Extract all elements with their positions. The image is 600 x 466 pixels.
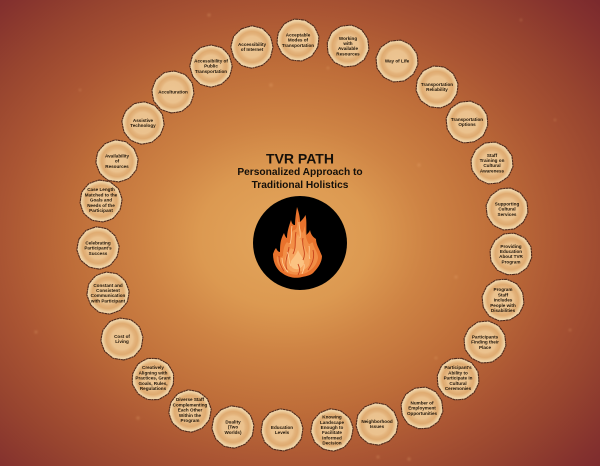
subtitle: Traditional Holistics: [252, 180, 349, 191]
subtitle: Personalized Approach to: [237, 167, 363, 178]
node: Participants Finding their Place: [455, 312, 515, 372]
node: Participant's Ability to Participate in Cultural Ceremonies: Ceremonies: [445, 386, 472, 391]
node: Participants Finding their Place: Place: [479, 345, 491, 350]
node: Case Length Matched to the Goals and Needs of the Participant: Goals and: [90, 198, 112, 203]
node: Availability of Resources: of: [115, 159, 120, 164]
node: Cost of Living: [99, 316, 145, 362]
node: Creatively Aligning with Practices, Grant Goals, Rules, Regulations: Practices, Grant: [135, 376, 171, 381]
node: Accessibility of Public Transportation: Public: [204, 64, 218, 69]
node: Knowing Landscape Enough to Facilitate Informed Decision: Facilitate: [322, 430, 342, 435]
node: Staff Training on Cultural Awareness: Cultural: [483, 163, 501, 168]
node: Acculturation: [150, 69, 196, 115]
node: Accessibility of Internet: of Internet: [241, 47, 264, 52]
node: Number of Employment Opportunities: [395, 381, 449, 435]
node: Creatively Aligning with Practices, Grant Goals, Rules, Regulations: Regulations: [140, 386, 167, 391]
node: Case Length Matched to the Goals and Needs of the Participant: Needs of the: [87, 203, 115, 208]
node: Working with Available Resources: Resources: [336, 51, 360, 56]
node: Knowing Landscape Enough to Facilitate Informed Decision: [304, 402, 360, 458]
node: Duality (Two Worlds): Worlds): [224, 430, 242, 435]
node: Supporting Cultural Services: [477, 179, 537, 239]
node: Participant's Ability to Participate in Cultural Ceremonies: [434, 355, 483, 403]
node: Staff Training on Cultural Awareness: Training on: [480, 158, 505, 163]
node: Diverse Staff Complementing Each Other Within the Program: Diverse Staff: [176, 397, 205, 402]
node: Program Staff Includes People with Disabilities: [476, 273, 530, 327]
node: Celebrating Participant's Success: Success: [89, 251, 108, 256]
node: Participants Finding their Place: Finding their: [471, 340, 499, 345]
node: Diverse Staff Complementing Each Other Within the Program: Each Other: [178, 408, 202, 413]
node: Accessibility of Internet: [223, 18, 281, 76]
node: Accessibility of Public Transportation: Transportation: [195, 69, 227, 74]
node: Supporting Cultural Services: Cultural: [498, 207, 516, 212]
node: Creatively Aligning with Practices, Grant Goals, Rules, Regulations: Goals, Rules,: [138, 381, 168, 386]
node: Availability of Resources: Resources: [105, 164, 129, 169]
node: Case Length Matched to the Goals and Needs of the Participant: Participant: [89, 208, 113, 213]
node: Accessibility of Public Transportation: [182, 37, 240, 95]
node: Availability of Resources: Availability: [105, 153, 129, 158]
node: Education Levels: Education: [271, 425, 293, 430]
node: Acceptable Modes of Transportation: Acceptable: [286, 32, 311, 37]
node: Program Staff Includes People with Disabilities: People with: [490, 303, 516, 308]
node: Availability of Resources: [88, 132, 146, 190]
node: Knowing Landscape Enough to Facilitate Informed Decision: Decision: [322, 441, 342, 446]
node: Creatively Aligning with Practices, Grant Goals, Rules, Regulations: Creatively: [142, 365, 164, 370]
node: Program Staff Includes People with Disabilities: Program: [494, 287, 512, 292]
node: Working with Available Resources: Available: [338, 46, 358, 51]
node: Neighborhood Issues: Issues: [370, 424, 385, 429]
node: Supporting Cultural Services: Services: [498, 212, 517, 217]
node: Celebrating Participant's Success: Participant's: [84, 246, 112, 251]
node: Accessibility of Public Transportation: Accessibility of: [194, 58, 228, 63]
node: Assistive Technology: Assistive: [133, 118, 154, 123]
node: Diverse Staff Complementing Each Other Within the Program: Program: [181, 418, 199, 423]
node: Knowing Landscape Enough to Facilitate Informed Decision: Enough to: [321, 425, 344, 430]
node: Constant and Consistent Communication with Participant: Constant and: [93, 283, 123, 288]
node: Way of Life: Way of Life: [385, 59, 410, 64]
node: Staff Training on Cultural Awareness: Staff: [487, 153, 498, 158]
node: Providing Education About TVR Program: [486, 230, 535, 278]
node: Case Length Matched to the Goals and Needs of the Participant: [78, 178, 124, 224]
node: Participants Finding their Place: Participants: [472, 334, 499, 339]
node: Participant's Ability to Participate in Cultural Ceremonies: Ability to: [448, 370, 468, 375]
node: Number of Employment Opportunities: Opportunities: [407, 411, 437, 416]
node: Transportation Options: Transportation: [451, 117, 483, 122]
node: Working with Available Resources: [321, 19, 375, 73]
node: Duality (Two Worlds): [204, 398, 262, 456]
node: Constant and Consistent Communication with Participant: [79, 264, 137, 322]
node: Acceptable Modes of Transportation: [271, 13, 325, 67]
node: Providing Education About TVR Program: Education: [500, 249, 522, 254]
node: Knowing Landscape Enough to Facilitate Informed Decision: Informed: [322, 435, 342, 440]
node: Case Length Matched to the Goals and Needs of the Participant: Case Length: [87, 187, 115, 192]
node: Providing Education About TVR Program: About TVR: [499, 254, 524, 259]
node: Participant's Ability to Participate in Cultural Ceremonies: Participate in: [444, 376, 473, 381]
node: Working with Available Resources: Working: [339, 36, 357, 41]
node: Program Staff Includes People with Disabilities: Includes: [494, 298, 513, 303]
node: Acceptable Modes of Transportation: Modes of: [288, 38, 309, 43]
node: Providing Education About TVR Program: Program: [502, 259, 520, 264]
node: Constant and Consistent Communication with Participant: Communication: [91, 293, 126, 298]
node: Transportation Reliability: [410, 60, 464, 114]
node: Way of Life: [367, 31, 427, 91]
node: Neighborhood Issues: [348, 395, 406, 453]
node: Diverse Staff Complementing Each Other Within the Program: Within the: [179, 413, 202, 418]
node: Cost of Living: Cost of: [114, 334, 130, 339]
node: Creatively Aligning with Practices, Grant Goals, Rules, Regulations: [127, 353, 179, 405]
node: Duality (Two Worlds): Duality: [225, 419, 241, 424]
node: Supporting Cultural Services: Supporting: [495, 201, 519, 206]
node: Constant and Consistent Communication with Participant: with Participant: [90, 298, 126, 303]
node: Program Staff Includes People with Disabilities: Disabilities: [491, 308, 516, 313]
node: Duality (Two Worlds): (Two: [228, 425, 238, 430]
node: Transportation Options: [440, 95, 494, 149]
node: Accessibility of Internet: Accessibility: [238, 42, 266, 47]
node: Program Staff Includes People with Disabilities: Staff: [498, 292, 509, 297]
node: Transportation Options: Options: [458, 122, 476, 127]
node: Celebrating Participant's Success: Celebrating: [85, 240, 111, 245]
node: Working with Available Resources: with: [342, 41, 353, 46]
node: Assistive Technology: [114, 94, 172, 152]
node: Participant's Ability to Participate in Cultural Ceremonies: Cultural: [449, 381, 467, 386]
node: Knowing Landscape Enough to Facilitate Informed Decision: Landscape: [320, 420, 344, 425]
node: Constant and Consistent Communication with Participant: Consistent: [96, 288, 120, 293]
node: Knowing Landscape Enough to Facilitate Informed Decision: Knowing: [322, 415, 342, 420]
node: Staff Training on Cultural Awareness: [462, 133, 522, 193]
node: Diverse Staff Complementing Each Other Within the Program: Complementing: [173, 402, 208, 407]
node: Staff Training on Cultural Awareness: Awareness: [480, 168, 505, 173]
node: Education Levels: [259, 407, 305, 453]
node: Participant's Ability to Participate in Cultural Ceremonies: Participant's: [444, 365, 472, 370]
node: Education Levels: Levels: [275, 430, 290, 435]
node: Number of Employment Opportunities: Employment: [408, 406, 436, 411]
node: Neighborhood Issues: Neighborhood: [361, 419, 393, 424]
node: Celebrating Participant's Success: [70, 220, 126, 276]
node: Acculturation: Acculturation: [158, 90, 188, 95]
title: TVR PATH: [266, 150, 334, 166]
node: Case Length Matched to the Goals and Needs of the Participant: Matched to the: [85, 192, 118, 197]
node: Cost of Living: Living: [115, 339, 129, 344]
node: Assistive Technology: Technology: [130, 123, 156, 128]
icon: fire in black circle: [253, 196, 347, 290]
node: Number of Employment Opportunities: Number of: [411, 400, 434, 405]
node: Transportation Reliability: Reliability: [426, 87, 448, 92]
node: Diverse Staff Complementing Each Other Within the Program: [162, 383, 218, 439]
node: Providing Education About TVR Program: Providing: [500, 244, 522, 249]
node: Creatively Aligning with Practices, Grant Goals, Rules, Regulations: Aligning with: [139, 370, 168, 375]
node: Transportation Reliability: Transportation: [421, 82, 453, 87]
node: Acceptable Modes of Transportation: Transportation: [282, 43, 314, 48]
